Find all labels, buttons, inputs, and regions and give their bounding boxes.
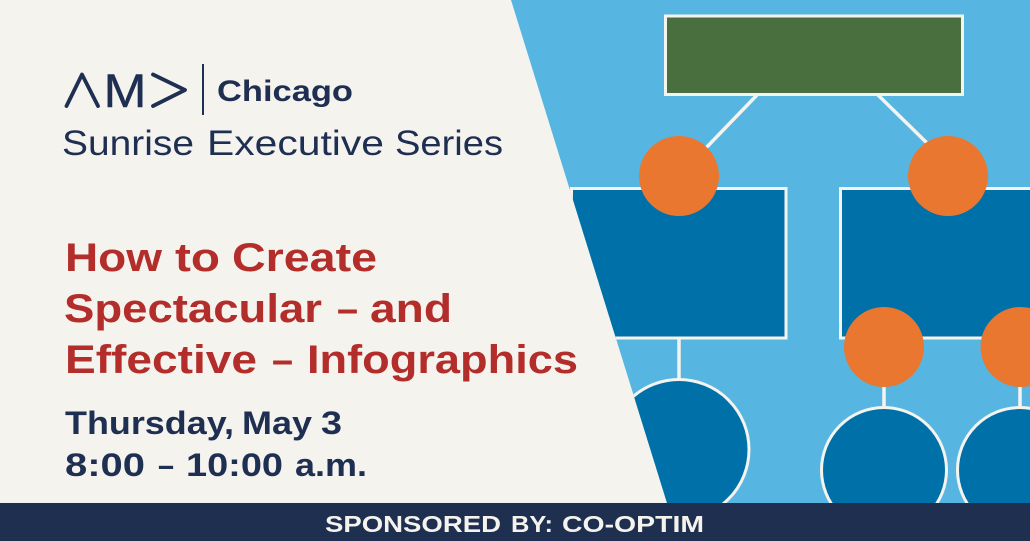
event date and time bbox=[65, 405, 367, 483]
heading: event title bbox=[64, 236, 578, 382]
heading line 1: to bbox=[175, 236, 220, 280]
heading line 3: – bbox=[272, 338, 293, 382]
time: 8:00 bbox=[65, 447, 145, 483]
time: – bbox=[158, 447, 174, 483]
heading line 1 bbox=[65, 236, 377, 280]
green top box bbox=[666, 16, 962, 94]
subtitle: series name: Series bbox=[395, 124, 503, 163]
subtitle: series name bbox=[62, 124, 503, 163]
subtitle: series name: Sunrise bbox=[62, 124, 194, 163]
left bottom circle bbox=[634, 378, 750, 503]
heading line 1: How bbox=[65, 236, 163, 280]
subtitle: series name: Executive bbox=[207, 124, 384, 163]
logo mark: A chevron bbox=[66, 74, 98, 106]
footer text: BY: bbox=[511, 511, 553, 537]
orange circle: upper left bbox=[639, 136, 719, 216]
footer text bbox=[325, 511, 704, 537]
footer text: SPONSORED bbox=[325, 511, 501, 537]
date bbox=[65, 405, 342, 441]
heading line 2: and bbox=[370, 287, 452, 331]
orange circle: upper right bbox=[908, 136, 988, 216]
date: 3 bbox=[321, 405, 342, 441]
footer text: CO-OPTIM bbox=[562, 511, 704, 537]
orange circle: lower right bbox=[980, 307, 1030, 387]
heading line 3: Infographics bbox=[307, 338, 578, 382]
footer background bbox=[0, 503, 1030, 541]
logo: AMA Chicago bbox=[66, 64, 353, 117]
panel: org chart illustration bbox=[500, 0, 1030, 532]
logo divider bbox=[202, 64, 204, 115]
footer sponsor bar bbox=[0, 503, 1030, 541]
time bbox=[65, 447, 367, 483]
left blue box bbox=[572, 188, 786, 338]
date: Thursday, bbox=[65, 405, 234, 441]
orange circle: lower middle bbox=[844, 307, 924, 387]
logo mark: right chevron bbox=[153, 74, 185, 106]
heading line 3: Effective bbox=[65, 338, 257, 382]
time: a.m. bbox=[295, 447, 367, 483]
heading line 2 bbox=[64, 287, 452, 331]
logo text: Chicago: Chicago bbox=[217, 75, 353, 108]
heading line 1: Create bbox=[232, 236, 377, 280]
logo mark: M: M bbox=[104, 64, 146, 117]
time: 10:00 bbox=[186, 447, 283, 483]
right bottom circle bbox=[956, 406, 1030, 503]
heading line 2: – bbox=[337, 287, 358, 331]
date: May bbox=[242, 405, 312, 441]
heading line 2: Spectacular bbox=[64, 287, 322, 331]
heading line 3 bbox=[65, 338, 578, 382]
middle bottom circle bbox=[820, 406, 948, 503]
right blue box bbox=[840, 188, 1030, 338]
connector lines bbox=[679, 95, 1020, 408]
sky blue background bbox=[500, 0, 1030, 503]
